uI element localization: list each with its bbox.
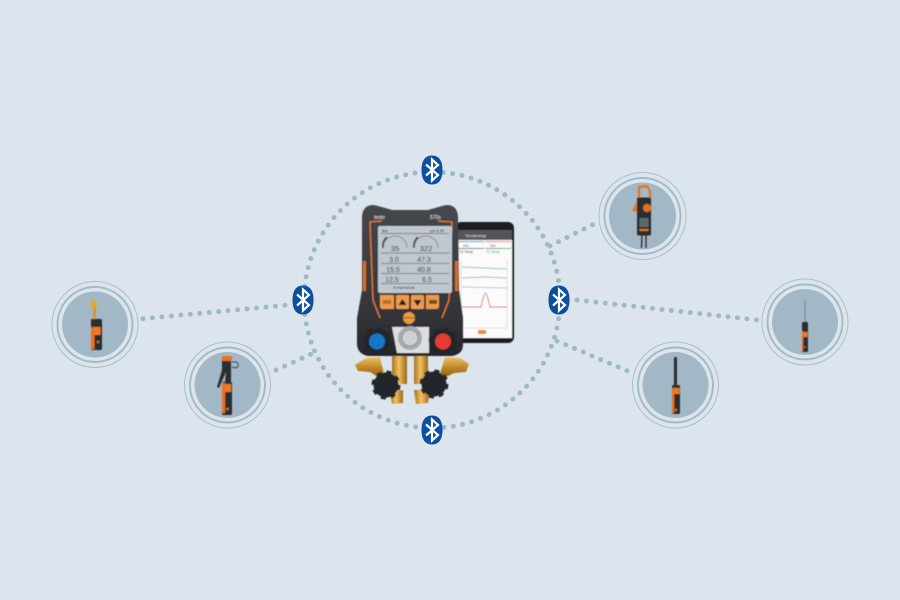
display readings: 12.5: [385, 277, 399, 284]
app button: [478, 330, 486, 334]
device: needle thermometer: [802, 300, 808, 352]
keypad buttons: [380, 295, 439, 309]
icon: bluetooth top: [422, 156, 442, 184]
display readings: 47.3: [417, 257, 431, 264]
display readings: R-Pull R410A: [393, 286, 415, 290]
dotted link: right bottom sensor: [557, 341, 630, 372]
smartphone with app: 560: [490, 244, 496, 248]
sensor badge: vane anemometer: [52, 282, 138, 368]
display readings: 3.0: [389, 257, 399, 264]
red valve knob: [430, 328, 456, 354]
dotted link: right middle sensor: [577, 300, 757, 320]
smartphone with app: [455, 222, 514, 343]
dotted connection ring: [304, 172, 560, 428]
LCD display: [378, 226, 452, 293]
model label: 570s: [430, 215, 441, 221]
smartphone with app: Trendanzeige: [465, 234, 486, 238]
smartphone with app: TS Temp: [459, 250, 473, 254]
smartphone with app: T2 Temp: [486, 250, 500, 254]
dotted link: left upper sensor: [143, 305, 288, 319]
device: vane probe: [90, 300, 102, 350]
smartphone with app: 560: [463, 244, 469, 248]
dotted link: right top sensor: [550, 224, 594, 246]
brass hose ports: [355, 354, 469, 404]
display readings: psi 8.35: [430, 228, 445, 233]
sensor badge: clamp probe: [184, 342, 270, 428]
app trend chart: [461, 259, 507, 328]
icon: bluetooth left: [292, 286, 314, 314]
device: humidity probe: [672, 357, 680, 414]
device: pipe clamp: [217, 356, 238, 415]
app screen: [457, 240, 512, 338]
logo dot: [403, 312, 415, 324]
manifold body: [357, 205, 463, 356]
lower black knob left: [373, 372, 399, 398]
display readings: 40.8: [417, 267, 431, 274]
brand label: testo: [374, 215, 385, 221]
dotted link: left lower sensor: [276, 352, 316, 370]
lower black knob right: [421, 371, 447, 397]
orange trim: [370, 221, 382, 318]
icon: bluetooth bottom: [422, 416, 442, 444]
display readings: 322: [420, 244, 432, 253]
sensor badge: thermometer probe: [762, 279, 848, 365]
blue valve knob: [364, 328, 390, 354]
display readings: Bar: [382, 228, 389, 233]
device: clamp meter: [632, 186, 651, 248]
sight glass plate: [392, 327, 429, 353]
display readings: 6.5: [422, 277, 432, 284]
display readings: 15.5: [386, 267, 400, 274]
sensor badge: humidity probe: [632, 342, 718, 428]
smart manifold: [355, 205, 469, 404]
sensor badge: clamp meter: [599, 172, 686, 260]
display readings: 35: [391, 244, 399, 253]
app header: [457, 230, 512, 240]
display gauges and rules: [381, 234, 449, 284]
icon: bluetooth right: [548, 286, 570, 314]
display readings: [382, 228, 445, 290]
